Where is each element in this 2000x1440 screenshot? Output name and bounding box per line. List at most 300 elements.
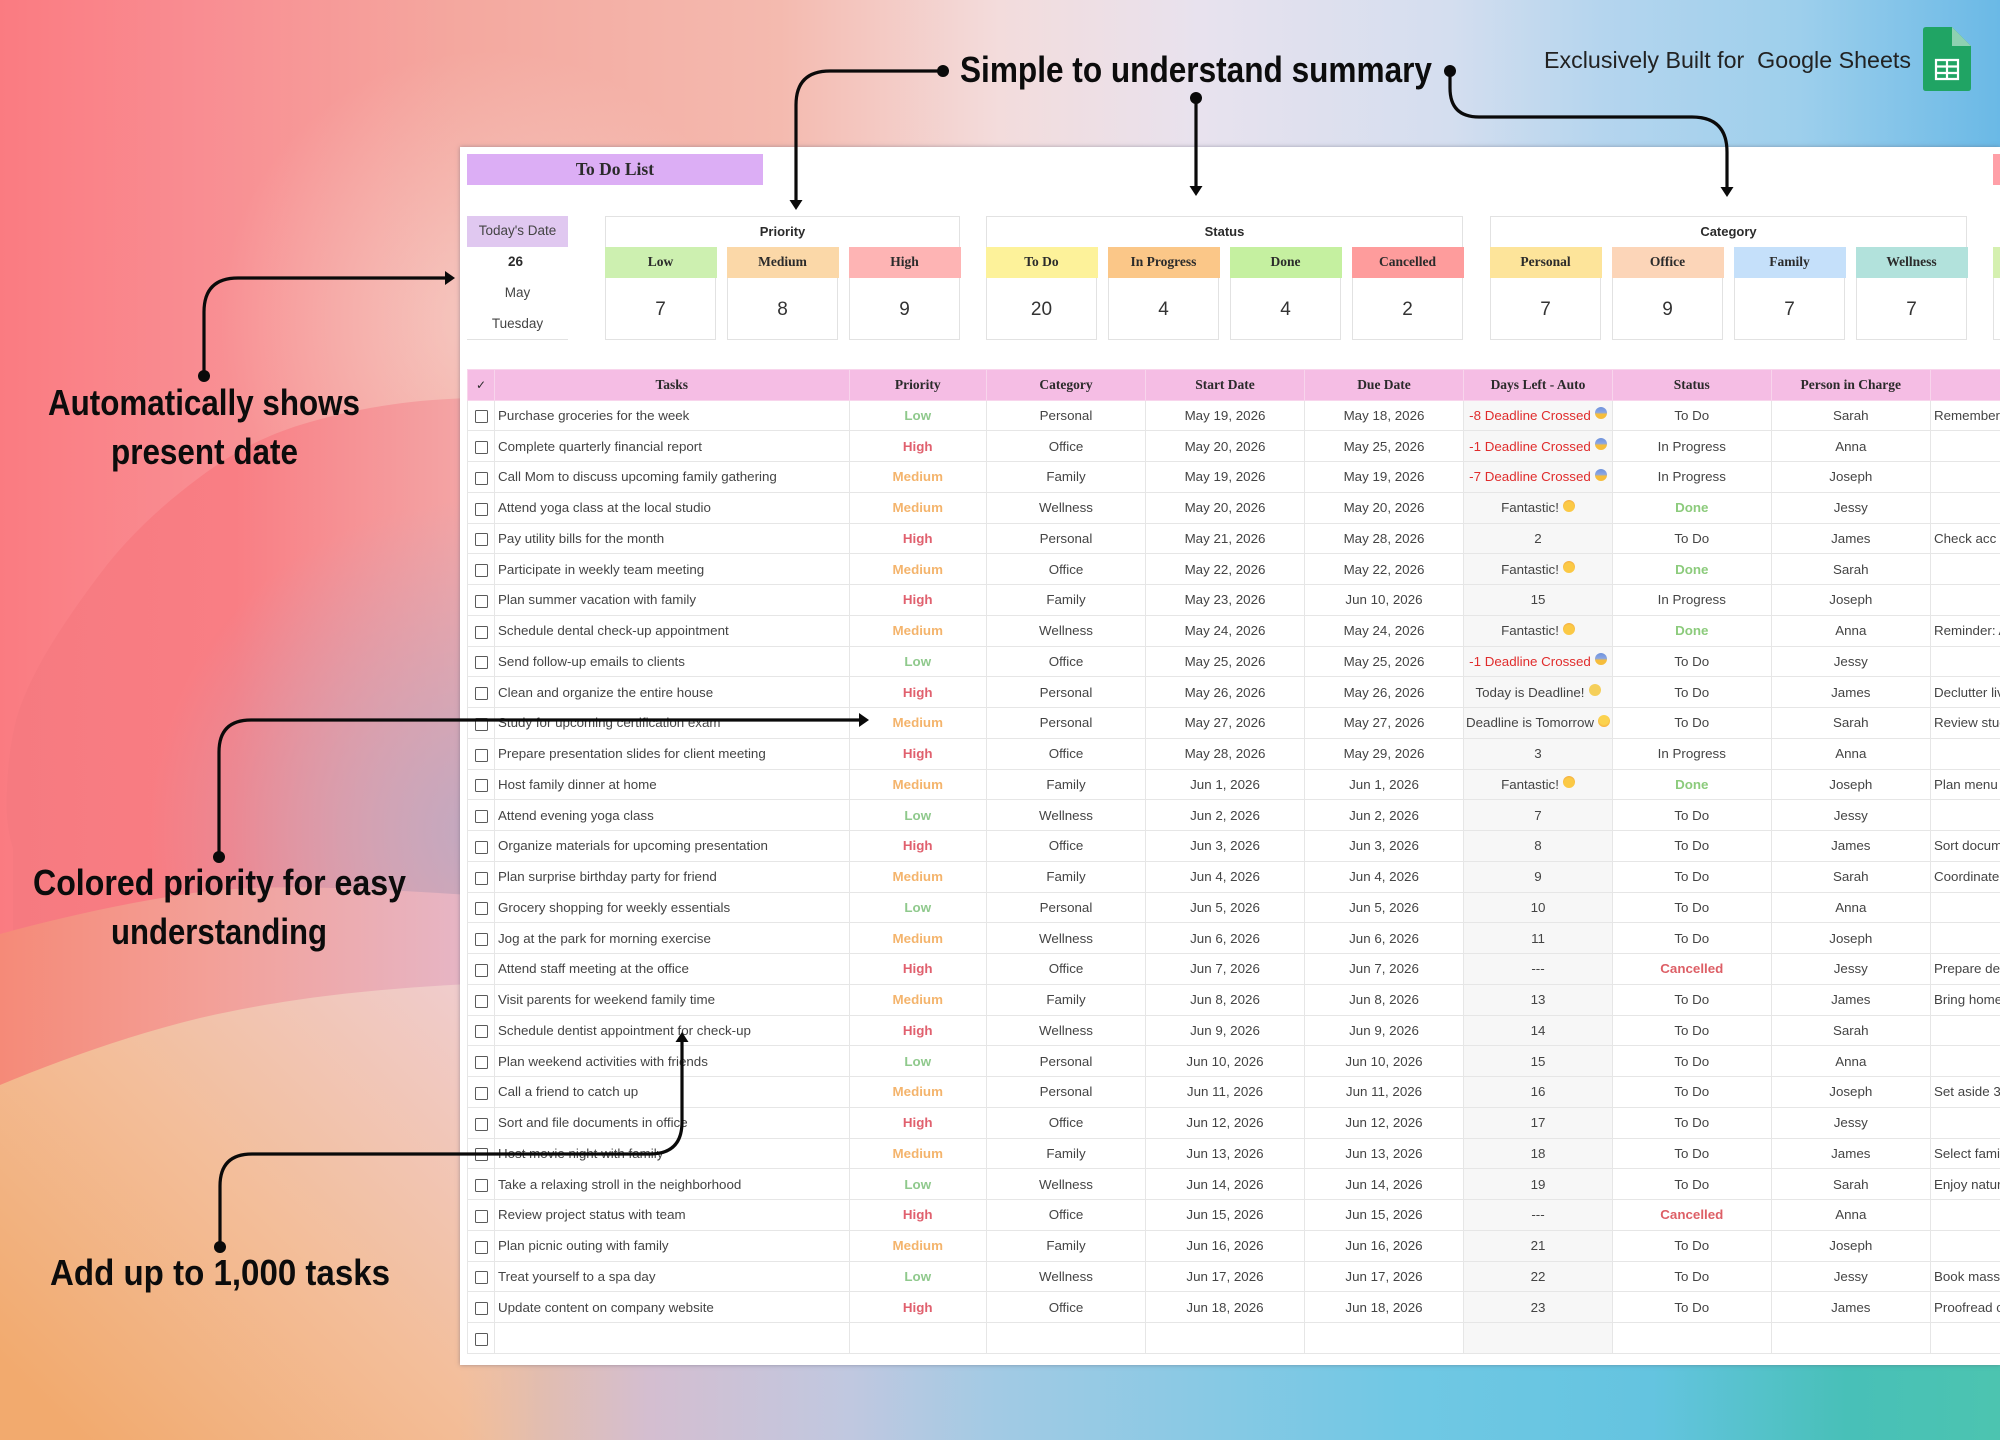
table task rows: Jun 3, 2026 xyxy=(1190,838,1260,853)
table task rows: Jun 3, 2026 xyxy=(1349,838,1419,853)
table task rows: Cancelled xyxy=(1660,961,1723,976)
arrow: date callout to date panel xyxy=(198,271,455,382)
table task rows: Plan surprise birthday party for friend xyxy=(498,869,717,884)
table task rows: Clean and organize the entire house xyxy=(498,685,713,700)
table task rows: May 25, 2026 xyxy=(1344,439,1424,454)
table task rows: Family xyxy=(1046,1146,1086,1161)
heading: colored priority for easy understanding: Colored priority for easy xyxy=(33,862,406,903)
table task rows: Medium xyxy=(893,1238,943,1253)
table task rows: High xyxy=(903,1300,933,1315)
card: wellness xyxy=(1856,247,1967,340)
table task rows: Jun 2, 2026 xyxy=(1190,808,1260,823)
table task rows: Jun 11, 2026 xyxy=(1187,1084,1263,1099)
table task rows: Take a relaxing stroll in the neighborhood xyxy=(498,1177,741,1192)
table task rows: Done xyxy=(1675,623,1708,638)
table task rows: To Do xyxy=(1674,1115,1709,1130)
table task rows: Jun 16, 2026 xyxy=(1186,1238,1264,1253)
table task rows: James xyxy=(1831,838,1870,853)
card: cancelled xyxy=(1352,247,1463,340)
table task rows: Plan summer vacation with family xyxy=(498,592,696,607)
table task rows: Medium xyxy=(893,715,943,730)
heading: colored priority for easy understanding xyxy=(33,862,406,952)
table task rows: Coordinate xyxy=(1934,869,1999,884)
card: family: 7 xyxy=(1784,298,1795,320)
card: to do: To Do xyxy=(1024,254,1059,268)
table task rows: 15 xyxy=(1531,1054,1545,1069)
date label xyxy=(467,216,568,247)
table header row: Person in Charge xyxy=(1801,377,1901,392)
table task rows: Sort and file documents in office xyxy=(498,1115,688,1130)
table task rows: Jun 11, 2026 xyxy=(1346,1084,1422,1099)
table task rows xyxy=(475,407,2000,1346)
table task rows: Send follow-up emails to clients xyxy=(498,654,685,669)
card: medium xyxy=(727,247,838,340)
table task rows: 9 xyxy=(1534,869,1542,884)
table task rows: Jun 2, 2026 xyxy=(1349,808,1419,823)
table task rows: Family xyxy=(1046,469,1086,484)
table task rows: High xyxy=(903,531,933,546)
table task rows: To Do xyxy=(1674,1269,1709,1284)
table task rows: In Progress xyxy=(1658,592,1726,607)
table task rows: 11 xyxy=(1531,931,1545,946)
table task rows: 21 xyxy=(1531,1238,1545,1253)
card: cancelled: 2 xyxy=(1402,298,1413,320)
panel: status summary xyxy=(986,216,1464,340)
table task rows: High xyxy=(903,685,933,700)
card: medium: Medium xyxy=(758,254,807,268)
table task rows: Jessy xyxy=(1834,961,1868,976)
card: wellness: Wellness xyxy=(1886,254,1937,268)
table task rows: Anna xyxy=(1835,900,1866,915)
card: to do xyxy=(986,247,1097,340)
table task rows: Sarah xyxy=(1833,1023,1869,1038)
table task rows: Low xyxy=(904,808,931,823)
arrow: summary to priority xyxy=(790,65,949,210)
table task rows: May 26, 2026 xyxy=(1344,685,1424,700)
table task rows: Jun 5, 2026 xyxy=(1190,900,1260,915)
table task rows: Fantastic! xyxy=(1501,777,1559,792)
table task rows: Sarah xyxy=(1833,715,1869,730)
card: personal xyxy=(1490,247,1601,340)
heading: add up to 1,000 tasks: Add up to 1,000 tasks xyxy=(50,1252,390,1293)
status heading: Status xyxy=(1205,224,1244,238)
table header row: Priority xyxy=(895,377,941,392)
table task rows: 19 xyxy=(1531,1177,1545,1192)
table task rows: Jun 1, 2026 xyxy=(1190,777,1260,792)
table task rows: Wellness xyxy=(1039,1269,1093,1284)
table task rows: Remember xyxy=(1934,408,2000,423)
table task rows: Participate in weekly team meeting xyxy=(498,562,704,577)
heading: automatically shows present date xyxy=(48,382,360,472)
task table xyxy=(467,369,2000,1354)
priority group frame xyxy=(605,216,960,248)
table task rows: Jessy xyxy=(1834,808,1868,823)
table task rows: Sarah xyxy=(1833,562,1869,577)
card: personal: Personal xyxy=(1520,254,1571,268)
heading: automatically shows present date: Automatically shows xyxy=(48,382,360,423)
category heading: Category xyxy=(1700,224,1757,238)
table task rows: James xyxy=(1831,1146,1870,1161)
table task rows: 10 xyxy=(1531,900,1545,915)
table task rows: May 18, 2026 xyxy=(1344,408,1424,423)
table task rows: To Do xyxy=(1674,808,1709,823)
table task rows: High xyxy=(903,961,933,976)
card: low: 7 xyxy=(655,298,666,320)
table task rows: Medium xyxy=(893,562,943,577)
table task rows: Today is Deadline! xyxy=(1475,685,1585,700)
table task rows: Jog at the park for morning exercise xyxy=(498,931,711,946)
table task rows: Low xyxy=(904,408,931,423)
table task rows: Office xyxy=(1049,838,1083,853)
panel: priority summary xyxy=(605,216,961,340)
table task rows: Anna xyxy=(1835,439,1866,454)
table task rows: Cancelled xyxy=(1660,1207,1723,1222)
cropped next card xyxy=(1993,247,2000,340)
table task rows: Personal xyxy=(1040,1054,1092,1069)
table task rows: Jun 4, 2026 xyxy=(1190,869,1260,884)
title bar: To Do List: To Do List xyxy=(576,159,654,179)
table task rows: To Do xyxy=(1674,1146,1709,1161)
table task rows: Jun 18, 2026 xyxy=(1345,1300,1423,1315)
table task rows: Prepare presentation slides for client meeting xyxy=(498,746,766,761)
table task rows: Jun 13, 2026 xyxy=(1186,1146,1264,1161)
table task rows: Low xyxy=(904,1269,931,1284)
table task rows: Jun 17, 2026 xyxy=(1186,1269,1264,1284)
table header row: Status xyxy=(1674,377,1710,392)
table task rows: Jun 7, 2026 xyxy=(1349,961,1419,976)
table task rows: Office xyxy=(1049,562,1083,577)
table task rows: Office xyxy=(1049,439,1083,454)
table task rows: May 29, 2026 xyxy=(1344,746,1424,761)
table task rows: 7 xyxy=(1534,808,1542,823)
table task rows: To Do xyxy=(1674,685,1709,700)
table task rows: Anna xyxy=(1835,623,1866,638)
card: family xyxy=(1734,247,1845,340)
table task rows: Jun 8, 2026 xyxy=(1349,992,1419,1007)
table task rows: Jun 12, 2026 xyxy=(1345,1115,1423,1130)
heading: colored priority for easy understanding: understanding xyxy=(111,911,327,952)
table task rows: Medium xyxy=(893,623,943,638)
table task rows: 23 xyxy=(1531,1300,1545,1315)
table task rows: Attend staff meeting at the office xyxy=(498,961,689,976)
table task rows: Jun 1, 2026 xyxy=(1349,777,1419,792)
card: office: Office xyxy=(1650,254,1685,268)
table task rows: Jun 10, 2026 xyxy=(1186,1054,1264,1069)
table task rows: Jun 18, 2026 xyxy=(1186,1300,1264,1315)
table task rows: To Do xyxy=(1674,931,1709,946)
table task rows: To Do xyxy=(1674,869,1709,884)
table task rows: To Do xyxy=(1674,992,1709,1007)
table task rows: Grocery shopping for weekly essentials xyxy=(498,900,730,915)
card: wellness: 7 xyxy=(1906,298,1917,320)
table task rows: May 26, 2026 xyxy=(1185,685,1265,700)
card: done: 4 xyxy=(1280,298,1291,320)
arrow: summary to status xyxy=(1190,92,1202,196)
table task rows: May 21, 2026 xyxy=(1185,531,1265,546)
table task rows: May 19, 2026 xyxy=(1185,469,1265,484)
table task rows: To Do xyxy=(1674,654,1709,669)
status group frame xyxy=(986,216,1463,248)
table task rows: High xyxy=(903,592,933,607)
table task rows: Prepare de xyxy=(1934,961,2000,976)
table header row: Days Left - Auto xyxy=(1491,377,1585,392)
table task rows: Office xyxy=(1049,1207,1083,1222)
table task rows: Update content on company website xyxy=(498,1300,714,1315)
table task rows: Office xyxy=(1049,654,1083,669)
table task rows: Anna xyxy=(1835,1054,1866,1069)
date label: Today's Date xyxy=(479,223,556,238)
table task rows: Medium xyxy=(893,869,943,884)
table task rows: Attend evening yoga class xyxy=(498,808,654,823)
table task rows: Personal xyxy=(1040,1084,1092,1099)
panel: today's date xyxy=(467,216,568,340)
table task rows: In Progress xyxy=(1658,439,1726,454)
table task rows: Personal xyxy=(1040,408,1092,423)
table task rows: Done xyxy=(1675,500,1708,515)
table task rows: Jessy xyxy=(1834,1269,1868,1284)
table task rows: Jun 10, 2026 xyxy=(1345,592,1423,607)
table task rows: Jun 6, 2026 xyxy=(1349,931,1419,946)
table task rows: Complete quarterly financial report xyxy=(498,439,702,454)
table task rows: Medium xyxy=(893,777,943,792)
table task rows: May 25, 2026 xyxy=(1185,654,1265,669)
icon: google sheets xyxy=(1923,27,1971,91)
weekday xyxy=(467,309,568,340)
card: personal: 7 xyxy=(1540,298,1551,320)
card: office: 9 xyxy=(1662,298,1673,320)
table task rows: May 22, 2026 xyxy=(1344,562,1424,577)
table task rows: Call Mom to discuss upcoming family gathering xyxy=(498,469,777,484)
table task rows: --- xyxy=(1531,1207,1545,1222)
table task rows: Joseph xyxy=(1829,592,1872,607)
table header row: Category xyxy=(1039,377,1093,392)
table task rows: Low xyxy=(904,900,931,915)
table task rows: High xyxy=(903,838,933,853)
table task rows: High xyxy=(903,1115,933,1130)
table task rows: May 24, 2026 xyxy=(1344,623,1424,638)
table task rows: To Do xyxy=(1674,1084,1709,1099)
table task rows: Jun 7, 2026 xyxy=(1190,961,1260,976)
table task rows: -7 Deadline Crossed xyxy=(1469,469,1591,484)
table task rows: Organize materials for upcoming presentation xyxy=(498,838,768,853)
table task rows: Medium xyxy=(893,1084,943,1099)
panel: category summary xyxy=(1490,154,2000,340)
table task rows: Sarah xyxy=(1833,1177,1869,1192)
table task rows: Family xyxy=(1046,869,1086,884)
table task rows: 2 xyxy=(1534,531,1542,546)
table task rows: Host movie night with family xyxy=(498,1146,663,1161)
table task rows: Wellness xyxy=(1039,1177,1093,1192)
table task rows: May 23, 2026 xyxy=(1185,592,1265,607)
table task rows: To Do xyxy=(1674,1238,1709,1253)
cropped pink button xyxy=(1993,154,2000,185)
table task rows: Family xyxy=(1046,992,1086,1007)
table task rows: Anna xyxy=(1835,746,1866,761)
table task rows: May 27, 2026 xyxy=(1185,715,1265,730)
table task rows: 14 xyxy=(1531,1023,1545,1038)
table task rows: To Do xyxy=(1674,838,1709,853)
title bar: To Do List xyxy=(467,154,763,185)
table task rows: To Do xyxy=(1674,1300,1709,1315)
table task rows: Jun 4, 2026 xyxy=(1349,869,1419,884)
card: done xyxy=(1230,247,1341,340)
table task rows: Office xyxy=(1049,961,1083,976)
table task rows: Medium xyxy=(893,469,943,484)
table task rows: Pay utility bills for the month xyxy=(498,531,664,546)
table task rows: High xyxy=(903,1207,933,1222)
table task rows: Jun 14, 2026 xyxy=(1186,1177,1264,1192)
table task rows: May 20, 2026 xyxy=(1185,500,1265,515)
table task rows: Medium xyxy=(893,500,943,515)
table task rows: Deadline is Tomorrow xyxy=(1466,715,1594,730)
panel: spreadsheet xyxy=(460,147,2000,1365)
table task rows: James xyxy=(1831,685,1870,700)
day number: 26 xyxy=(508,254,523,269)
table task rows: Purchase groceries for the week xyxy=(498,408,689,423)
arrow: tasks callout to task rows xyxy=(214,1032,688,1253)
arrow: summary to category xyxy=(1444,65,1734,197)
table task rows: Select fami xyxy=(1934,1146,2000,1161)
table task rows: To Do xyxy=(1674,1023,1709,1038)
table task rows: May 24, 2026 xyxy=(1185,623,1265,638)
table task rows: Personal xyxy=(1040,715,1092,730)
table task rows: To Do xyxy=(1674,715,1709,730)
table task rows: Office xyxy=(1049,746,1083,761)
card: family: Family xyxy=(1769,254,1810,268)
table task rows: May 19, 2026 xyxy=(1344,469,1424,484)
table task rows: Fantastic! xyxy=(1501,562,1559,577)
table task rows: High xyxy=(903,746,933,761)
table header row: Tasks xyxy=(655,377,688,392)
table task rows: Jun 12, 2026 xyxy=(1186,1115,1264,1130)
table header row xyxy=(468,370,2000,400)
card: low xyxy=(605,247,716,340)
table task rows: -1 Deadline Crossed xyxy=(1469,439,1591,454)
table task rows: 13 xyxy=(1531,992,1545,1007)
priority heading: Priority xyxy=(760,224,805,238)
table task rows: Fantastic! xyxy=(1501,500,1559,515)
table task rows: Office xyxy=(1049,1115,1083,1130)
table task rows: To Do xyxy=(1674,1177,1709,1192)
table task rows: Wellness xyxy=(1039,808,1093,823)
table header row: Start Date xyxy=(1195,377,1255,392)
table task rows: In Progress xyxy=(1658,746,1726,761)
table task rows: Personal xyxy=(1040,900,1092,915)
table task rows: To Do xyxy=(1674,408,1709,423)
table task rows: Jun 6, 2026 xyxy=(1190,931,1260,946)
table task rows: Jun 9, 2026 xyxy=(1349,1023,1419,1038)
table task rows: Jun 17, 2026 xyxy=(1345,1269,1423,1284)
table task rows: Family xyxy=(1046,1238,1086,1253)
table task rows: To Do xyxy=(1674,1054,1709,1069)
table task rows: Jun 15, 2026 xyxy=(1186,1207,1264,1222)
table task rows: May 19, 2026 xyxy=(1185,408,1265,423)
card: low: Low xyxy=(648,254,673,268)
table task rows: Personal xyxy=(1040,531,1092,546)
table task rows: Family xyxy=(1046,592,1086,607)
table task rows: Jun 10, 2026 xyxy=(1345,1054,1423,1069)
card: cancelled: Cancelled xyxy=(1379,254,1436,268)
card: medium: 8 xyxy=(777,298,788,320)
table task rows: May 22, 2026 xyxy=(1185,562,1265,577)
table task rows: Jun 9, 2026 xyxy=(1190,1023,1260,1038)
table task rows: 15 xyxy=(1531,592,1545,607)
card: in progress xyxy=(1108,247,1219,340)
table task rows: Low xyxy=(904,1177,931,1192)
table task rows: May 27, 2026 xyxy=(1344,715,1424,730)
table task rows: Done xyxy=(1675,777,1708,792)
table task rows: Plan menu xyxy=(1934,777,1998,792)
table task rows: Joseph xyxy=(1829,469,1872,484)
table task rows: Schedule dentist appointment for check-up xyxy=(498,1023,751,1038)
table task rows: Jessy xyxy=(1834,1115,1868,1130)
table task rows: Joseph xyxy=(1829,777,1872,792)
table task rows: Plan weekend activities with friends xyxy=(498,1054,708,1069)
table task rows: Sarah xyxy=(1833,408,1869,423)
table task rows: Joseph xyxy=(1829,1084,1872,1099)
table task rows: Joseph xyxy=(1829,1238,1872,1253)
table task rows: Jun 16, 2026 xyxy=(1345,1238,1423,1253)
table task rows: 8 xyxy=(1534,838,1542,853)
table task rows: Review project status with team xyxy=(498,1207,686,1222)
table task rows: James xyxy=(1831,1300,1870,1315)
table task rows: 22 xyxy=(1531,1269,1545,1284)
table task rows: Call a friend to catch up xyxy=(498,1084,638,1099)
table task rows: May 20, 2026 xyxy=(1344,500,1424,515)
table task rows: Visit parents for weekend family time xyxy=(498,992,715,1007)
table task rows: High xyxy=(903,1023,933,1038)
table task rows: 17 xyxy=(1531,1115,1545,1130)
card: in progress: 4 xyxy=(1158,298,1169,320)
table task rows: Wellness xyxy=(1039,623,1093,638)
table task rows: Medium xyxy=(893,1146,943,1161)
table task rows: 3 xyxy=(1534,746,1542,761)
table task rows: Schedule dental check-up appointment xyxy=(498,623,729,638)
table task rows: Sarah xyxy=(1833,869,1869,884)
card: high: High xyxy=(890,254,919,268)
table task rows: James xyxy=(1831,992,1870,1007)
table task rows: Jun 13, 2026 xyxy=(1345,1146,1423,1161)
table task rows: -1 Deadline Crossed xyxy=(1469,654,1591,669)
arrow: priority callout to priority column xyxy=(213,713,869,863)
table task rows: Joseph xyxy=(1829,931,1872,946)
table task rows: Jun 14, 2026 xyxy=(1345,1177,1423,1192)
table task rows: James xyxy=(1831,531,1870,546)
month: May xyxy=(505,285,530,300)
table task rows: Enjoy natur xyxy=(1934,1177,2000,1192)
table header row: ✓ xyxy=(476,378,486,392)
table task rows: Jessy xyxy=(1834,654,1868,669)
table task rows: Wellness xyxy=(1039,931,1093,946)
heading: automatically shows present date: present date xyxy=(111,431,298,472)
table task rows: 16 xyxy=(1531,1084,1545,1099)
table task rows: Jessy xyxy=(1834,500,1868,515)
table task rows: To Do xyxy=(1674,900,1709,915)
table task rows: Medium xyxy=(893,992,943,1007)
category group frame xyxy=(1490,216,1967,248)
card: to do: 20 xyxy=(1031,298,1052,320)
card: high: 9 xyxy=(899,298,910,320)
table task rows: Anna xyxy=(1835,1207,1866,1222)
card: high xyxy=(849,247,960,340)
table task rows: Low xyxy=(904,654,931,669)
heading: simple to understand summary: Simple to understand summary xyxy=(960,49,1432,90)
table task rows: Family xyxy=(1046,777,1086,792)
table task rows: --- xyxy=(1531,961,1545,976)
table task rows: Personal xyxy=(1040,685,1092,700)
table task rows: In Progress xyxy=(1658,469,1726,484)
table task rows: May 28, 2026 xyxy=(1344,531,1424,546)
